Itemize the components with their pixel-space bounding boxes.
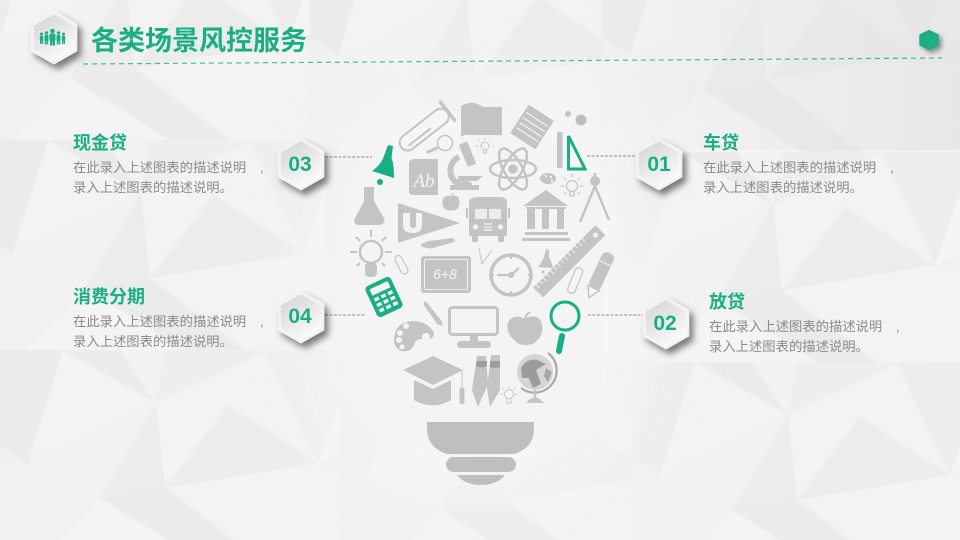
- icon: chalkboard: [421, 256, 471, 293]
- icon: open book: [461, 103, 502, 137]
- icon: pencils: [472, 355, 500, 407]
- text block: 现金贷: 录入上述图表的描述说明。: [73, 180, 233, 195]
- icon: dots: [565, 111, 586, 126]
- text block: 车贷: ,: [890, 160, 894, 175]
- icon: globe: [517, 353, 557, 403]
- icon: big pencil: [583, 251, 616, 300]
- text block: 现金贷: 在此录入上述图表的描述说明: [73, 160, 246, 175]
- icon: corner hexagon: [920, 30, 938, 50]
- icon: people: [40, 29, 65, 46]
- icon: notepad: [510, 105, 554, 149]
- icon: small pencil: [421, 238, 455, 248]
- text block: 消费分期: ,: [260, 314, 264, 329]
- title: 各类场景风控服务: [91, 26, 307, 56]
- icon: microscope: [450, 141, 483, 190]
- icon: chalkboard: 6+8: [433, 266, 457, 282]
- bulb illustration: [350, 100, 616, 485]
- text block: 车贷: 录入上述图表的描述说明。: [703, 180, 863, 195]
- badge 03: [279, 139, 323, 189]
- text block: 车贷: [703, 132, 894, 195]
- icon: tiny bulb: [501, 386, 517, 403]
- connector lines: [325, 156, 645, 315]
- badge 04: 04: [288, 305, 312, 328]
- badge 02: 02: [653, 312, 677, 335]
- icon: flask: [354, 187, 384, 225]
- badge 01: [637, 139, 681, 189]
- icon: big bulb: [350, 230, 392, 277]
- icon: small magnifier: [428, 136, 452, 152]
- icon: ruler: [533, 225, 605, 297]
- text block: 放贷: 录入上述图表的描述说明。: [709, 339, 869, 354]
- text block: 车贷: 在此录入上述图表的描述说明: [703, 160, 876, 175]
- background: [802, 0, 960, 150]
- icon: green bell: [372, 145, 394, 185]
- icon: test tube outline: [566, 267, 584, 295]
- text block: 消费分期: 消费分期: [73, 287, 145, 307]
- icon: ruler bar: [557, 132, 562, 168]
- icon: green magnifier: [551, 302, 579, 351]
- icon: small apple: [443, 193, 459, 210]
- badge 04: [279, 292, 323, 342]
- icon: lit bulb: [561, 174, 583, 196]
- text block: 放贷: ,: [896, 319, 900, 334]
- icon: test tube: [393, 100, 457, 158]
- icon: small grey bell: [538, 249, 553, 274]
- icon: bank: [522, 190, 570, 241]
- icon: Ab book: [409, 159, 438, 195]
- icon: compass: [580, 173, 609, 222]
- icon: apple: [507, 312, 542, 345]
- icon: graduation cap: [403, 356, 464, 406]
- text block: 车贷: 车贷: [703, 132, 739, 153]
- text block: 消费分期: 在此录入上述图表的描述说明: [73, 314, 246, 329]
- icon: clock: [491, 255, 531, 295]
- text block: 现金贷: 现金贷: [73, 132, 127, 153]
- icon: green calculator: [364, 276, 404, 318]
- header divider: [83, 58, 942, 64]
- text block: 消费分期: 录入上述图表的描述说明。: [73, 334, 233, 349]
- text block: 放贷: [709, 291, 900, 354]
- bulb base: [427, 422, 534, 485]
- icon: pennant: [398, 203, 460, 243]
- text block: 放贷: 放贷: [709, 291, 745, 312]
- icon: green set square: [568, 136, 585, 169]
- icon: monitor: [450, 308, 498, 348]
- text block: 放贷: 在此录入上述图表的描述说明: [709, 319, 882, 334]
- badge 03: 03: [288, 153, 312, 176]
- badge 02: [644, 298, 688, 348]
- icon: palette: [394, 321, 434, 351]
- icon: atom: [490, 145, 536, 193]
- icon: school bus: [466, 197, 510, 242]
- icon: tick: [479, 248, 492, 264]
- icon: Ab book: Ab: [411, 171, 435, 192]
- text block: 消费分期: [73, 287, 264, 349]
- icon: small bulb: [476, 138, 494, 153]
- text block: 现金贷: [73, 132, 264, 195]
- badge 01: 01: [647, 153, 671, 176]
- icon: small crayon: [424, 302, 442, 325]
- title badge: [32, 12, 76, 63]
- icon: small test tube: [394, 254, 409, 275]
- icon: small palette: [540, 173, 556, 184]
- text block: 现金贷: ,: [260, 160, 264, 175]
